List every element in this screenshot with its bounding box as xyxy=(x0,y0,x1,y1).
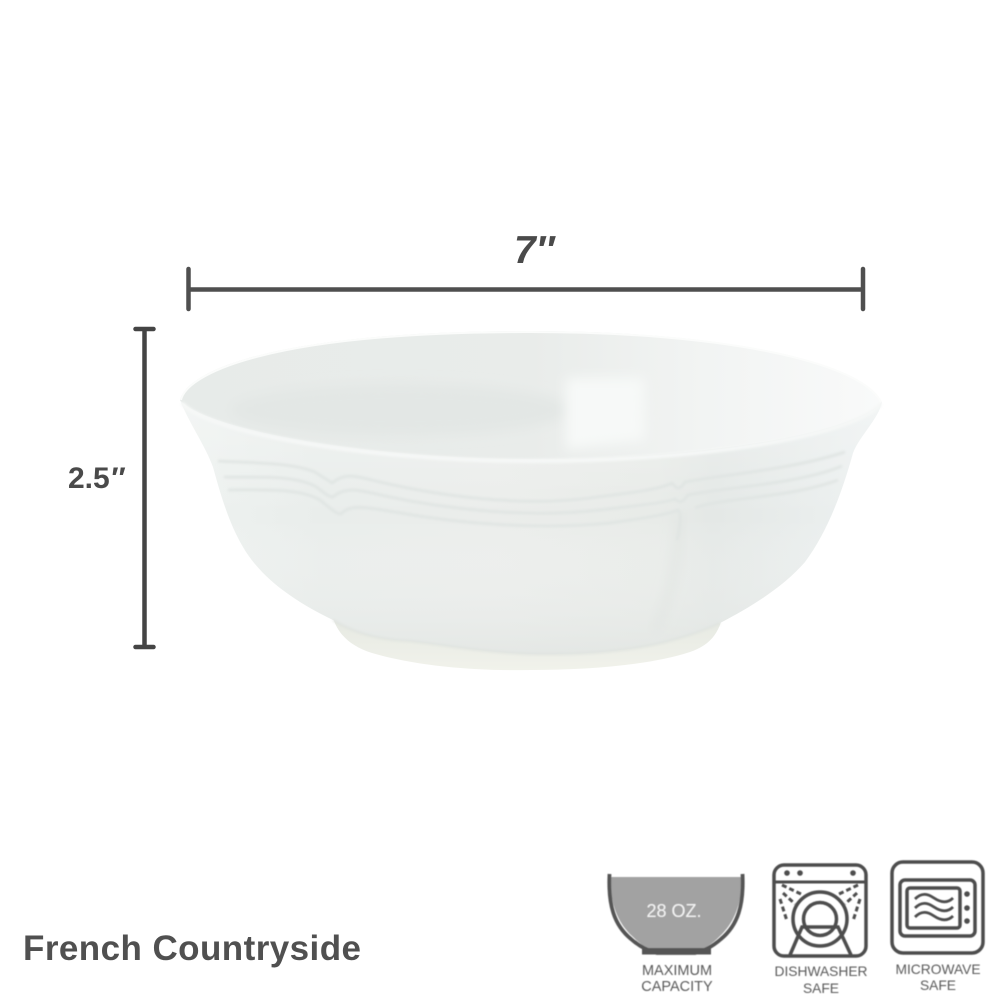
water spray xyxy=(780,885,803,921)
dimension: width 7 inches xyxy=(188,229,863,309)
microwave buttons xyxy=(964,891,970,924)
caption: maximum capacity: MAXIMUM xyxy=(642,963,712,979)
icon: dishwasher safe xyxy=(774,865,866,956)
caption: dishwasher safe: SAFE xyxy=(803,981,839,996)
microwave frame xyxy=(892,862,983,953)
rack xyxy=(790,927,851,955)
interior light reflection xyxy=(566,378,645,450)
rim top edge xyxy=(181,332,881,402)
bowl interior shadow xyxy=(230,384,570,436)
height measure line xyxy=(136,329,154,647)
waves xyxy=(915,894,953,920)
bowl interior xyxy=(180,331,882,459)
foot junction shadow xyxy=(333,620,720,654)
height label: 2.5″ xyxy=(68,462,126,495)
control dots xyxy=(784,870,856,876)
width measure line xyxy=(188,269,863,309)
bowl foot xyxy=(333,600,721,670)
dishwasher body xyxy=(774,865,866,956)
caption: maximum capacity: CAPACITY xyxy=(641,979,713,995)
bowl fill xyxy=(610,877,742,952)
icon: maximum capacity bowl xyxy=(609,874,743,954)
embossed pattern lines xyxy=(218,452,845,540)
caption: microwave safe: MICROWAVE xyxy=(895,962,981,977)
outer wall shading xyxy=(180,380,882,654)
panel ridge xyxy=(655,515,680,632)
plate xyxy=(793,892,847,946)
caption: microwave safe: SAFE xyxy=(920,978,956,993)
width label: 7″ xyxy=(514,229,557,272)
caption: dishwasher safe: DISHWASHER xyxy=(774,964,868,979)
capacity value: 28 OZ. xyxy=(646,901,702,921)
icon: microwave safe xyxy=(892,862,983,953)
microwave window xyxy=(907,888,960,928)
rim highlight xyxy=(182,403,881,461)
title: French Countryside xyxy=(23,929,361,968)
microwave body xyxy=(900,880,975,936)
dimension: height 2.5 inches xyxy=(68,329,154,647)
bowl base xyxy=(642,948,711,954)
bowl photo xyxy=(180,331,882,670)
bowl outer wall xyxy=(180,380,882,654)
bowl outline xyxy=(609,874,743,953)
